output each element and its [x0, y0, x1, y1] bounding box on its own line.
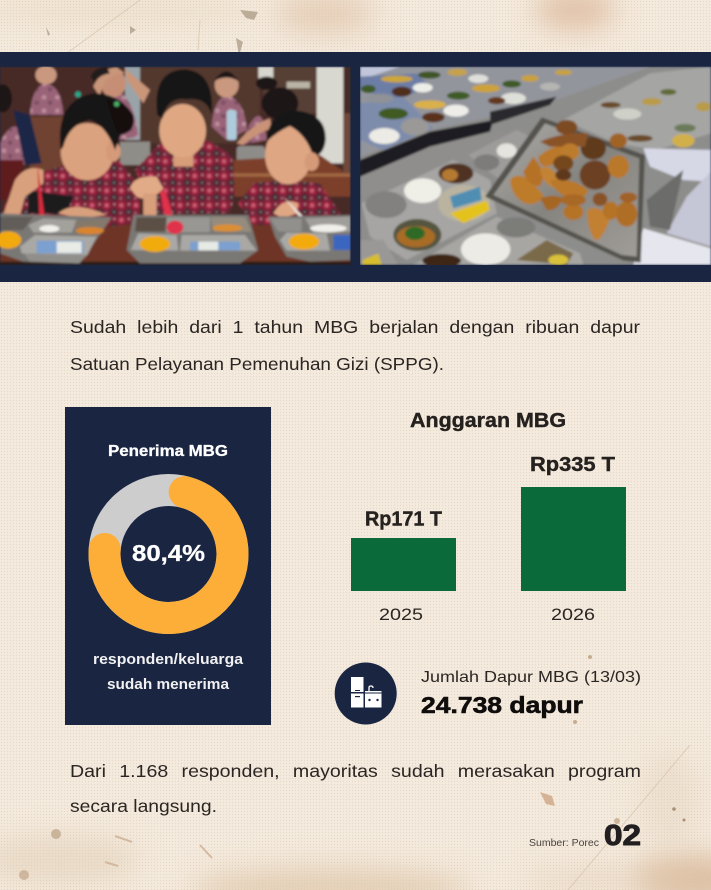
bar 2025: Rp171 T: [365, 508, 442, 530]
bar 2025: 2025: [379, 605, 423, 624]
panel heading: Penerima MBG: [108, 443, 228, 460]
intro text: Satuan Pelayanan Pemenuhan Gizi (SPPG).: [70, 354, 444, 374]
kitchen count stat: [421, 669, 641, 718]
bar 2026: 2026: [551, 605, 595, 624]
panel caption: [93, 652, 244, 693]
icon: kitchen: [335, 662, 397, 724]
photo: children eating MBG meals: [0, 66, 351, 265]
bar 2026: Rp335 T: [530, 454, 615, 476]
bar 2026: [521, 454, 626, 624]
closing text: [70, 761, 641, 816]
panel caption: sudah menerima: [107, 677, 230, 693]
navy photo band: [0, 52, 711, 282]
closing text: Dari 1.168 responden, mayoritas sudah merasakan program: [70, 761, 641, 781]
page number: 02: [604, 820, 641, 852]
chart heading: Anggaran MBG: [410, 410, 566, 432]
photo: steel meal trays with fried chicken: [360, 67, 711, 267]
chart: Anggaran MBG: [351, 410, 626, 624]
intro text: [70, 317, 640, 374]
kitchen count stat: Jumlah Dapur MBG (13/03): [421, 669, 641, 686]
panel caption: responden/keluarga: [93, 652, 244, 668]
panel: Penerima MBG: [65, 407, 271, 725]
intro text: Sudah lebih dari 1 tahun MBG berjalan dengan ribuan dapur: [70, 317, 640, 337]
donut value: 80,4%: [132, 540, 205, 566]
kitchen count stat: 24.738 dapur: [421, 692, 583, 718]
donut chart 80,4%: [104, 490, 233, 618]
closing text: secara langsung.: [70, 796, 217, 816]
source note: Sumber: Porec: [529, 838, 599, 849]
bar 2025: [351, 508, 456, 624]
